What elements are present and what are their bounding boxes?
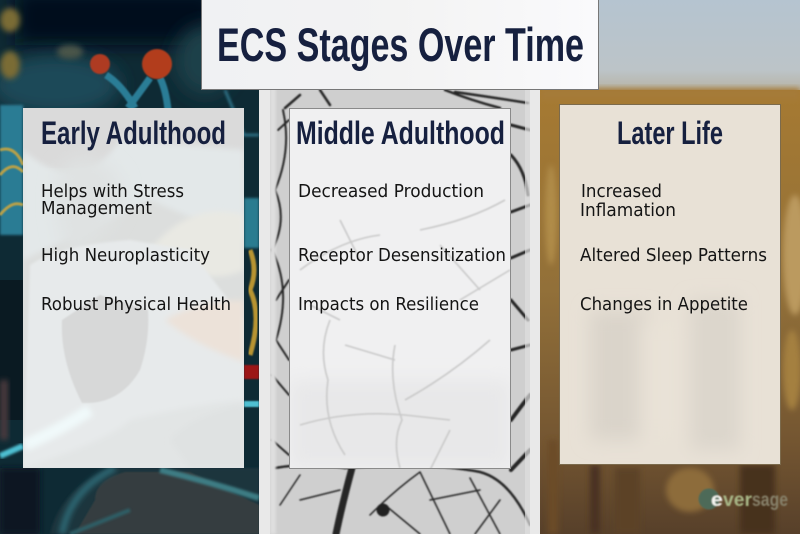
panel: early adulthood [23,108,244,468]
text: receptor desensitization: Receptor Desensitization [298,246,506,266]
logo: eversage [698,488,788,511]
text: appetite: Changes in Appetite [580,295,748,315]
panel: later life [560,104,780,464]
logo: eversage: ver [723,490,753,511]
panel: middle adulthood [290,108,510,470]
logo: eversage: sage [752,490,788,511]
text: decreased production: Decreased Production [298,182,484,202]
text: stress management: Helps with Stress [41,182,184,202]
photo: branching veins [270,90,530,534]
photo: wheat field [540,0,800,534]
title: ECS Stages Over Time [217,18,584,71]
text: inflammation [580,182,676,221]
text: stress management: Management [41,199,152,219]
text: inflammation: Inflamation [580,201,676,221]
text: inflammation: Increased [581,182,662,202]
logo: eversage: e [711,490,723,511]
text: physical health: Robust Physical Health [41,295,231,315]
heading: later life: Later Life [617,115,723,151]
text: stress management [41,182,184,219]
photo: neuron illustration [0,0,259,534]
heading: middle adulthood: Middle Adulthood [296,115,505,151]
text: resilience: Impacts on Resilience [298,295,479,315]
text: sleep patterns: Altered Sleep Patterns [580,246,767,266]
heading: early adulthood: Early Adulthood [41,115,226,151]
title banner [202,0,598,90]
text: neuroplasticity: High Neuroplasticity [41,246,210,266]
